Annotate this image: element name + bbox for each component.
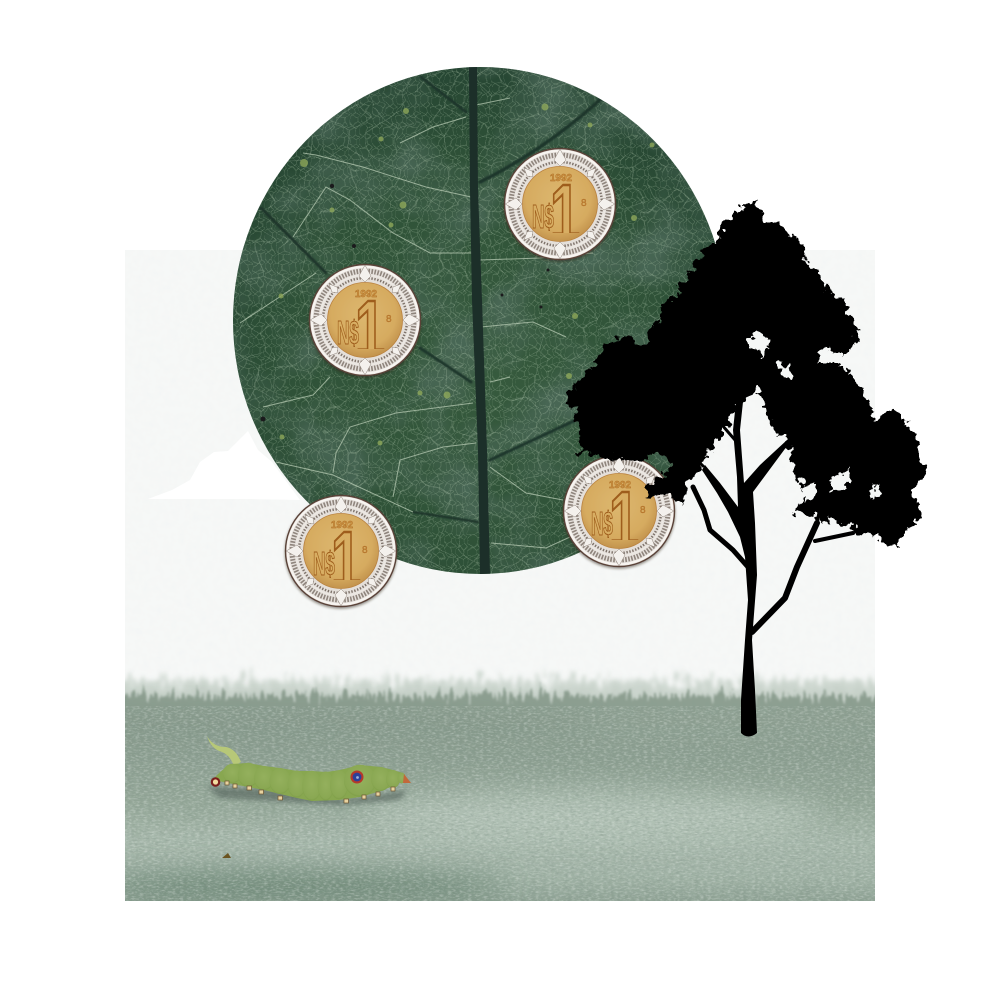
- tree canopy gaps: [750, 334, 878, 500]
- coin: top right: N$: [532, 198, 554, 235]
- caterpillar body base: [213, 763, 405, 801]
- panel: paper backdrop: [125, 250, 875, 901]
- coin: lower right: 1: [609, 474, 639, 567]
- leaf dark specks: [260, 184, 550, 422]
- leaf speckles: [278, 104, 654, 446]
- caterpillar: [207, 736, 411, 805]
- coin: top right: 1992: [550, 173, 573, 184]
- caterpillar eye spot: [350, 770, 364, 784]
- coin: lower right: 1992: [609, 480, 632, 491]
- tree side branches: [687, 425, 853, 632]
- tree silhouette: [567, 202, 925, 736]
- leaf fine vein network: [226, 66, 734, 576]
- caterpillar shadow: [207, 787, 407, 805]
- coin: middle left: 1992: [355, 289, 378, 300]
- leaf dark shading veins: [261, 77, 603, 522]
- leaf pale side veins: [240, 98, 593, 548]
- tree foliage: [567, 202, 925, 550]
- coin: lower right: [564, 456, 674, 567]
- caterpillar rear spot: [211, 777, 220, 787]
- coin: top right: 1: [550, 167, 580, 260]
- coin: lower left: N$: [313, 545, 335, 582]
- coin: lower left: [286, 496, 396, 607]
- coin: top right: 8: [581, 198, 587, 209]
- coin: middle left: 8: [386, 314, 392, 325]
- caterpillar segments: [223, 763, 406, 801]
- coin: lower left: 8: [362, 545, 368, 556]
- coin: lower left: 1: [331, 514, 361, 607]
- small speck on grass: [222, 853, 231, 858]
- tree trunk: [702, 383, 790, 736]
- caterpillar tail: [207, 736, 241, 766]
- grass field: [125, 668, 875, 901]
- coin: lower left: 1992: [331, 520, 354, 531]
- leaf coarse vein network: [226, 66, 734, 576]
- white cloud shape: [148, 431, 300, 500]
- caterpillar head tip: [403, 774, 411, 783]
- coin: lower right: N$: [591, 505, 613, 542]
- coin: top right: [504, 148, 616, 260]
- caterpillar feet: [225, 781, 395, 803]
- coin: middle left: 1: [355, 283, 385, 376]
- coin: middle left: [310, 264, 420, 376]
- leaf circle: [226, 66, 734, 576]
- coin: middle left: N$: [337, 314, 359, 351]
- coin: lower right: 8: [640, 505, 646, 516]
- leaf midrib: [469, 67, 490, 574]
